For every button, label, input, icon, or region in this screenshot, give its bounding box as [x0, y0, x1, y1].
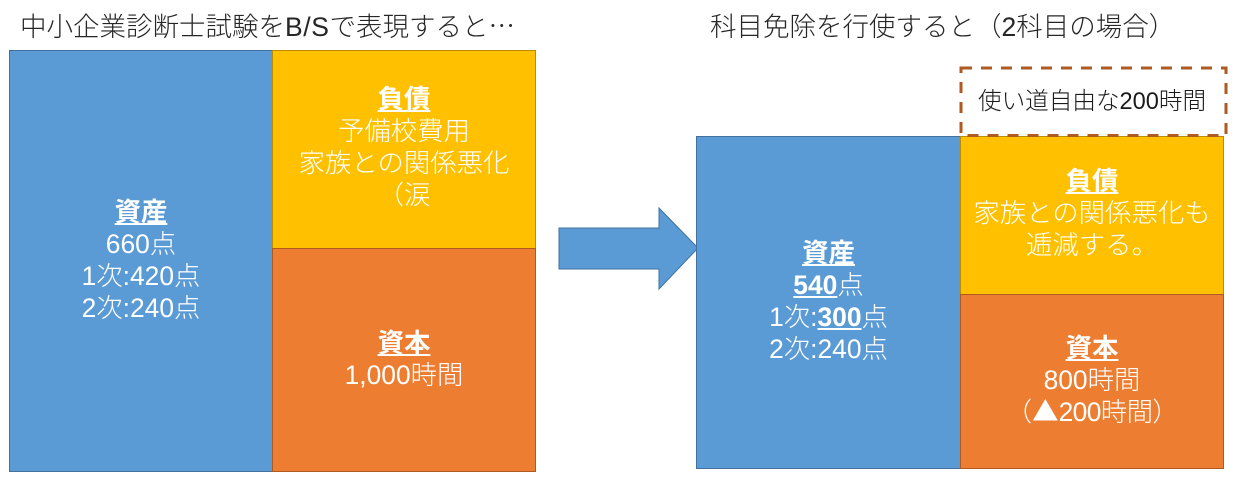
- panel: left liabilities: 家族との関係悪化: [299, 148, 509, 178]
- panel: right assets: [696, 136, 961, 469]
- panel: left capital: 1,000時間: [345, 360, 463, 390]
- panel: right liabilities: 逓減する。: [1026, 230, 1158, 260]
- panel: left liabilities: 負債: [378, 84, 430, 114]
- panel: right capital: 資本: [1066, 333, 1118, 363]
- panel: right liabilities: 負債: [1066, 166, 1118, 196]
- panel: left assets: 660点: [106, 229, 176, 259]
- panel: right assets: 1次:300点: [769, 302, 888, 332]
- panel: right liabilities: 家族との関係悪化も: [973, 198, 1211, 228]
- panel: right liabilities: [960, 136, 1224, 295]
- title: left heading: 中小企業診断士試験をB/Sで表現すると…: [20, 5, 515, 44]
- panel: right capital: （▲200時間）: [1006, 390, 1178, 429]
- panel: right assets: 2次:240点: [769, 334, 888, 364]
- panel: left assets: 2次:240点: [82, 293, 200, 323]
- arrow: transition: [558, 207, 696, 290]
- panel: left assets: 資産: [115, 197, 167, 227]
- panel: left capital: 資本: [378, 328, 430, 358]
- panel: left liabilities: （涙: [378, 180, 430, 210]
- panel: right assets: 540点: [793, 270, 864, 300]
- panel: left assets: [9, 50, 273, 472]
- panel: right capital: 800時間: [1044, 365, 1140, 395]
- panel: left liabilities: [272, 50, 536, 249]
- panel: left liabilities: 予備校費用: [338, 116, 470, 146]
- panel: left assets: 1次:420点: [82, 261, 200, 291]
- panel: left capital: [272, 248, 536, 472]
- callout: free 200 hours: 使い道自由な200時間: [978, 89, 1206, 115]
- title: right heading: 科目免除を行使すると（2科目の場合）: [710, 12, 1175, 42]
- panel: right assets: 資産: [802, 238, 855, 268]
- callout: free 200 hours: [960, 66, 1228, 137]
- panel: right capital: [960, 294, 1224, 469]
